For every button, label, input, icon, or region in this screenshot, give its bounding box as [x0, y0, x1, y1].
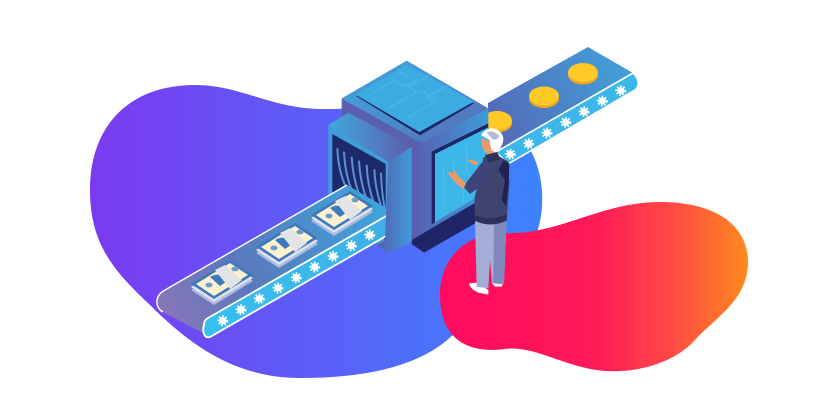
coin 2 — [529, 86, 559, 108]
jacket collar — [485, 152, 501, 163]
sweater — [475, 154, 509, 224]
machine left wall — [342, 98, 422, 243]
side screen — [432, 123, 488, 224]
right belt surface — [488, 47, 633, 152]
coin 1 — [568, 63, 598, 84]
left belt side band — [203, 215, 388, 337]
shoes — [469, 283, 503, 295]
top circuit panel — [356, 64, 474, 135]
person standing at machine — [447, 128, 509, 295]
left conveyor belt with cash — [157, 185, 390, 337]
machine hood side pillar — [377, 147, 412, 253]
machine base — [412, 197, 475, 253]
cash stack 2 — [256, 223, 318, 268]
arm — [463, 160, 490, 194]
neck and face — [482, 138, 497, 158]
near hand — [447, 169, 466, 189]
left belt upper white edge — [157, 185, 347, 312]
white hair — [481, 128, 503, 152]
blue blob background — [90, 85, 542, 378]
hood front frame — [328, 125, 388, 253]
hood top — [328, 113, 412, 162]
right belt side band — [496, 73, 638, 164]
dark opening with flaps — [332, 134, 386, 240]
right conveyor belt with coins — [482, 47, 638, 164]
trousers — [475, 219, 507, 288]
coin 3 — [482, 111, 512, 132]
machine body — [328, 61, 488, 253]
left belt surface — [157, 185, 390, 333]
machine top face — [342, 61, 488, 143]
machine right face — [412, 108, 488, 240]
far hand — [468, 159, 478, 165]
cash stack 3 — [311, 191, 373, 236]
cash stack 1 — [191, 260, 253, 305]
red blob background — [440, 202, 748, 371]
